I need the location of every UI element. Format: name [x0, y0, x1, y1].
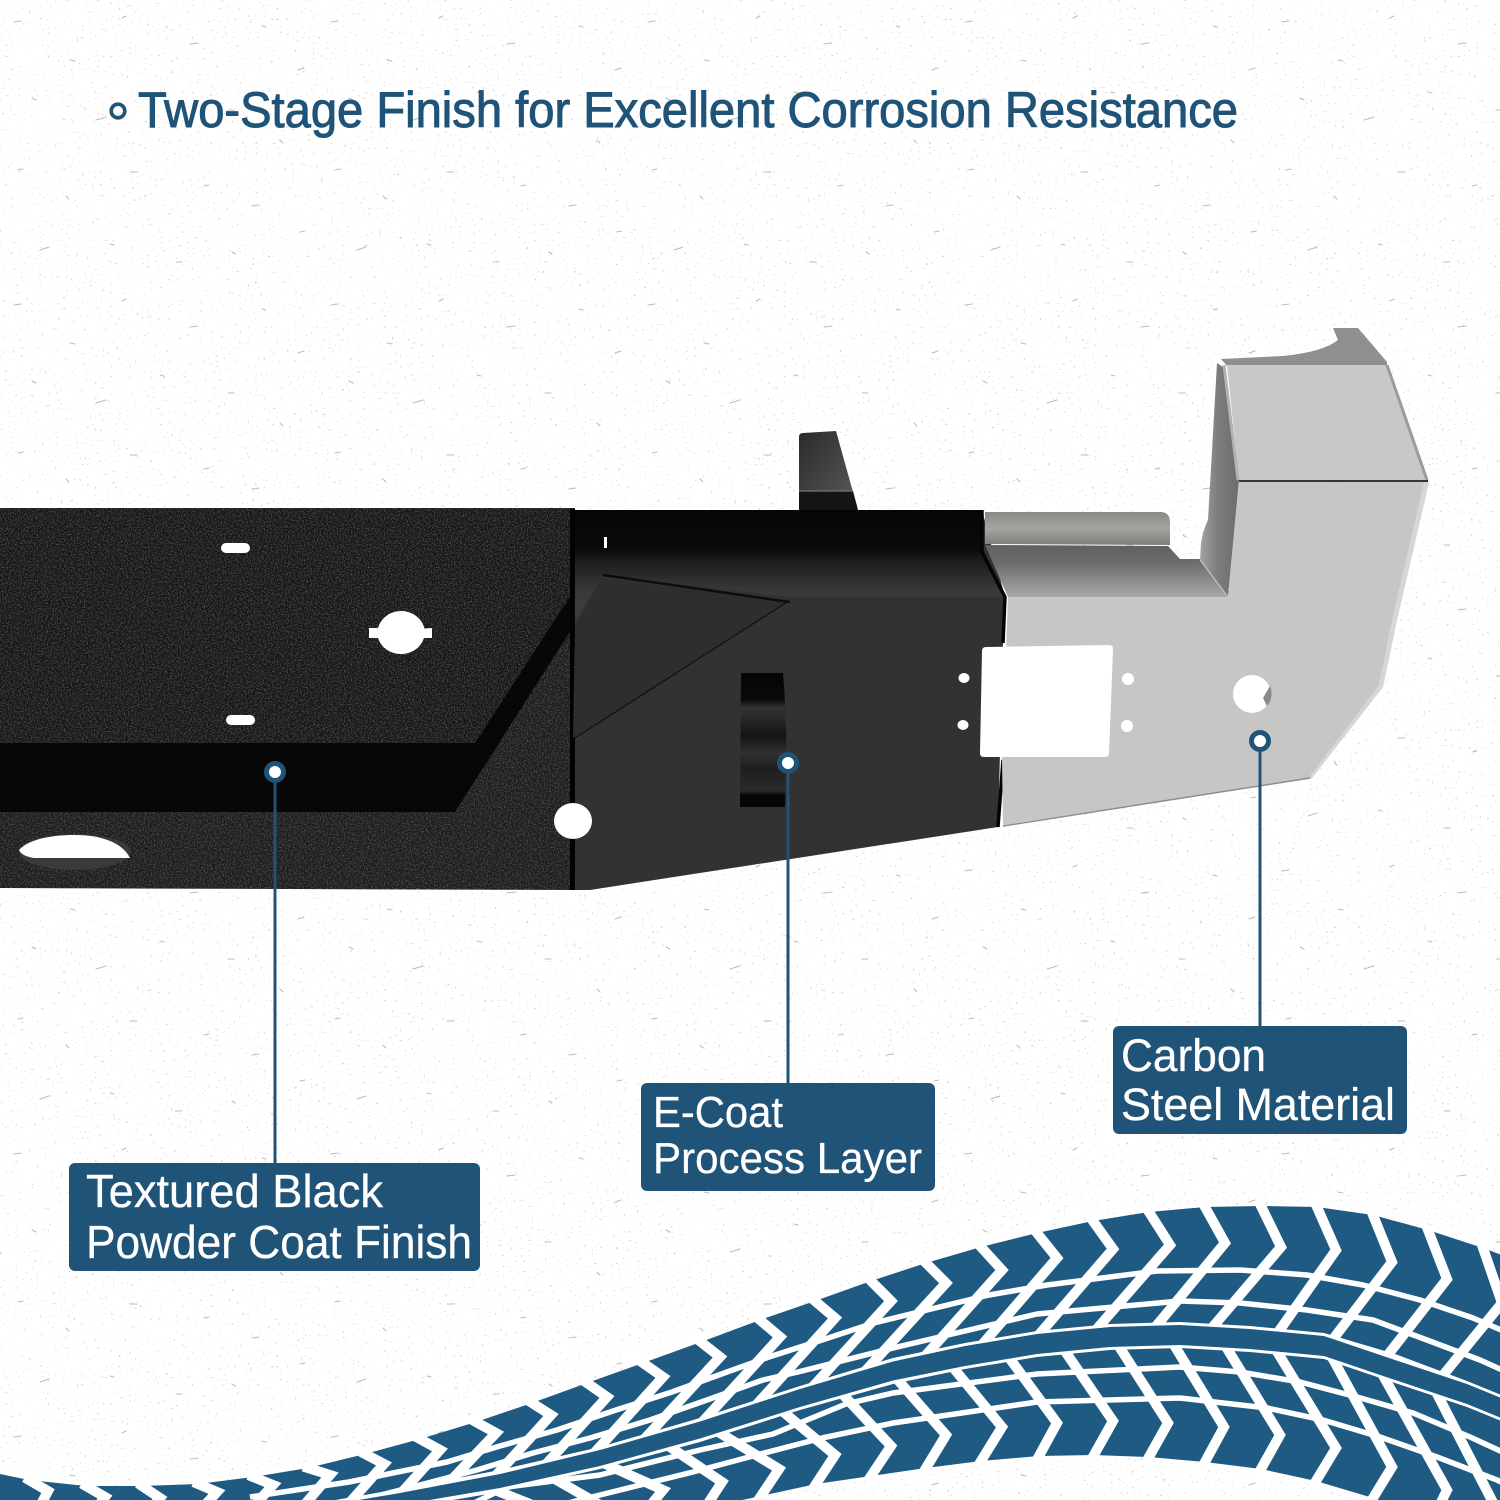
callout: e-coat process layer	[641, 754, 935, 1191]
leader line	[274, 780, 276, 1165]
label box	[641, 1083, 935, 1191]
marker	[780, 754, 796, 772]
bolt holes	[958, 673, 970, 730]
panel: bare carbon steel section	[980, 328, 1429, 826]
large round hole	[1233, 675, 1272, 713]
label text: Steel Material	[1121, 1079, 1395, 1130]
label text: Carbon	[1121, 1030, 1266, 1081]
title bullet ring	[111, 104, 125, 118]
label text: Powder Coat Finish	[86, 1216, 472, 1268]
leader line	[1258, 752, 1262, 1028]
edge round hole	[554, 803, 592, 839]
title	[111, 82, 1238, 138]
tire tread graphic	[0, 1206, 1500, 1500]
panel: e-coat section	[573, 510, 1005, 890]
leader line	[786, 772, 790, 1085]
keyed round hole	[369, 611, 432, 654]
label box	[69, 1163, 480, 1271]
mount post	[799, 431, 858, 510]
marker	[1252, 732, 1268, 750]
bolt holes	[1121, 673, 1134, 732]
label box	[1113, 1026, 1407, 1134]
label text: Process Layer	[653, 1134, 922, 1183]
bumper illustration	[0, 328, 1429, 890]
callout: textured black powder coat	[69, 764, 480, 1271]
square cut-out	[980, 645, 1113, 757]
slot holes	[221, 543, 250, 553]
label text: Textured Black	[86, 1165, 384, 1217]
title text: Two-Stage Finish for Excellent Corrosion Resistance	[138, 82, 1238, 138]
handle recess	[740, 673, 786, 807]
marker	[266, 764, 284, 780]
callout: carbon steel material	[1113, 732, 1407, 1134]
label text: E-Coat	[653, 1088, 783, 1137]
panel: textured black section	[0, 508, 575, 890]
oval hole	[19, 834, 131, 870]
